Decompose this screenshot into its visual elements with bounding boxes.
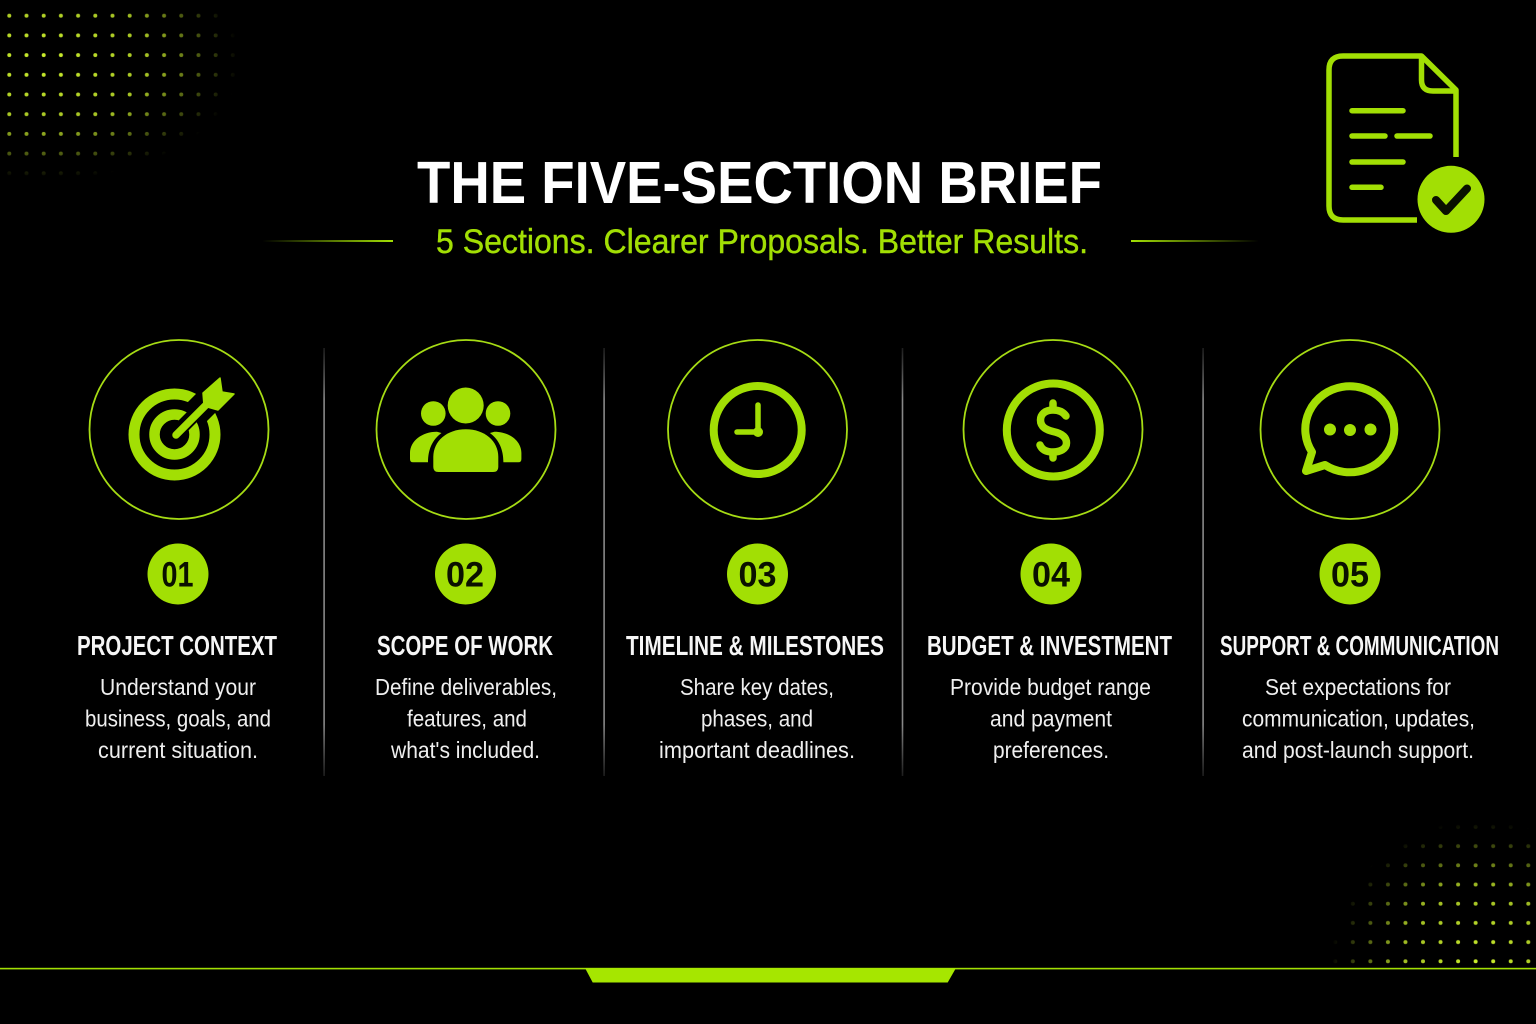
description: project context: business, goals, and	[85, 706, 271, 732]
number badge 03: 03	[738, 556, 776, 594]
number badge 04	[1020, 544, 1082, 604]
icon: clock	[668, 340, 847, 519]
description: support and communication: communication, updates,	[1242, 706, 1475, 732]
heading: scope of work: SCOPE OF WORK	[377, 630, 553, 661]
number badge 05: 05	[1331, 556, 1369, 594]
description: scope of work	[375, 674, 557, 763]
description: support and communication: Set expectations for	[1265, 674, 1451, 700]
panel: project context	[77, 340, 277, 763]
heading: timeline and milestones: TIMELINE & MILESTONES	[626, 630, 884, 661]
description: project context	[85, 674, 271, 763]
icon: document with check mark	[1329, 56, 1484, 233]
panel: scope of work	[375, 340, 557, 763]
title: THE FIVE-SECTION BRIEF	[417, 150, 1102, 216]
number badge 01	[148, 544, 208, 604]
heading: project context: PROJECT CONTEXT	[77, 630, 277, 661]
description: timeline and milestones	[659, 674, 855, 763]
icon: group of people	[376, 340, 556, 519]
description: budget and investment: Provide budget range	[950, 674, 1151, 700]
number badge 03	[727, 544, 788, 604]
description: scope of work: what's included.	[390, 737, 540, 763]
description: budget and investment: preferences.	[993, 737, 1109, 763]
panel: support and communication	[1220, 340, 1499, 763]
number badge 04: 04	[1032, 556, 1071, 594]
description: support and communication: and post-launch support.	[1242, 737, 1474, 763]
subtitle with side rules: 5 Sections. Clearer Proposals. Better Results.	[436, 223, 1088, 261]
description: budget and investment	[950, 674, 1151, 763]
description: project context: current situation.	[98, 737, 258, 763]
footer bar	[0, 968, 1536, 982]
number badge 01: 01	[162, 556, 194, 594]
icon: chat bubble	[1260, 340, 1440, 519]
description: timeline and milestones: important deadlines.	[659, 737, 855, 763]
description: scope of work: features, and	[407, 706, 527, 732]
icon: target with arrow	[90, 340, 268, 519]
description: project context: Understand your	[100, 674, 256, 700]
panel: budget and investment	[927, 340, 1172, 763]
description: budget and investment: and payment	[990, 706, 1112, 732]
panel: timeline and milestones	[626, 340, 884, 763]
heading: budget and investment: BUDGET & INVESTMENT	[927, 630, 1172, 661]
description: timeline and milestones: Share key dates,	[680, 674, 834, 700]
description: timeline and milestones: phases, and	[701, 706, 813, 732]
number badge 02: 02	[446, 556, 484, 594]
icon: dollar coin	[964, 340, 1142, 519]
description: support and communication	[1242, 674, 1475, 763]
number badge 02	[435, 544, 496, 604]
description: scope of work: Define deliverables,	[375, 674, 557, 700]
number badge 05	[1320, 544, 1380, 604]
